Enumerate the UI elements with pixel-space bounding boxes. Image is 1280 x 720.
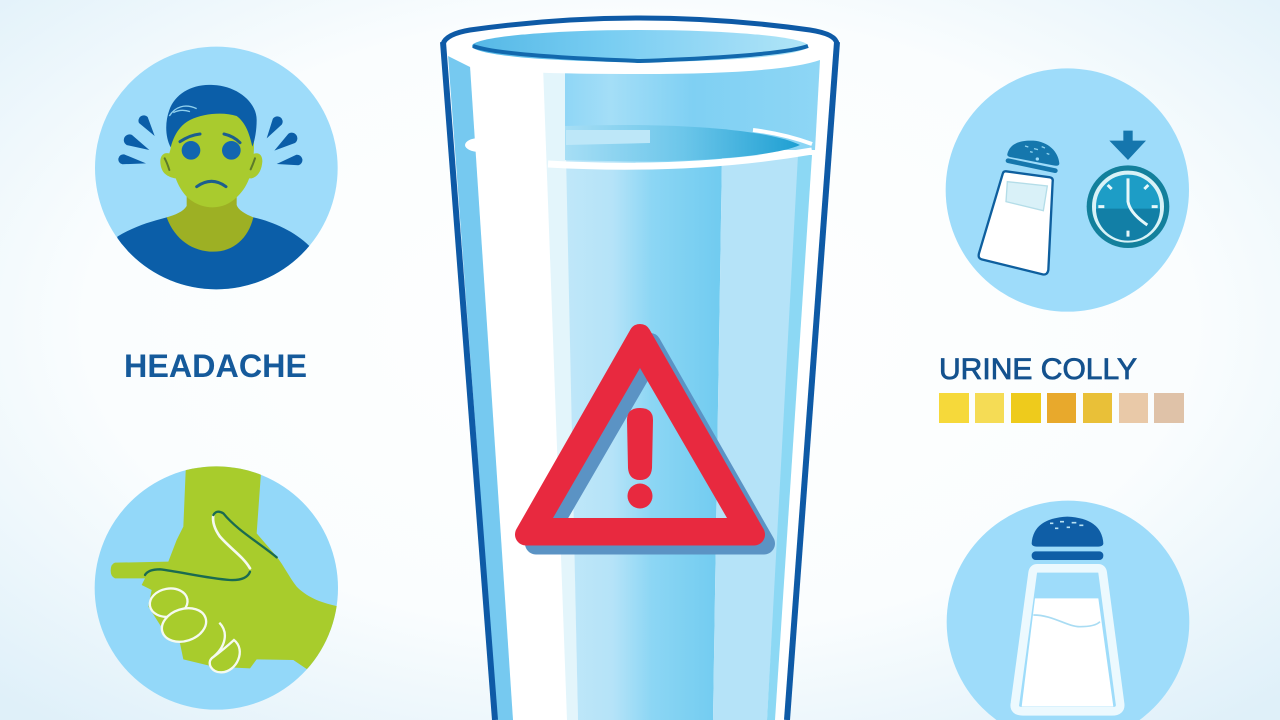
water surface [465,125,812,166]
clock [1087,165,1169,248]
salt shaker body [979,171,1053,274]
glass right pale band [713,155,800,720]
icon: green hand [95,463,343,710]
glass outline right [787,42,837,720]
icon: large salt shaker [947,501,1189,720]
urine colour swatches [939,393,1184,423]
triangle shadow [525,333,775,554]
glass rim [443,17,837,74]
glass left blue band [448,55,513,720]
icon: headache person [95,47,338,297]
heading: urine colour label: URINE COLLY [939,353,1137,386]
warning triangle [515,324,775,554]
glass outline left [443,42,495,720]
heading: headache label: HEADACHE [124,348,307,384]
glass pale reflection [543,66,578,720]
exclamation mark [627,408,653,508]
glass right saturated strip [767,155,812,720]
salt shaker cap [1007,141,1059,171]
arrow down [1109,131,1146,160]
triangle [515,324,765,546]
glass of water [442,17,838,720]
icon: salt shaker and clock [946,68,1189,312]
glass centre lower [566,155,722,720]
glass centre upper [565,60,820,150]
glass body white base [442,40,838,720]
